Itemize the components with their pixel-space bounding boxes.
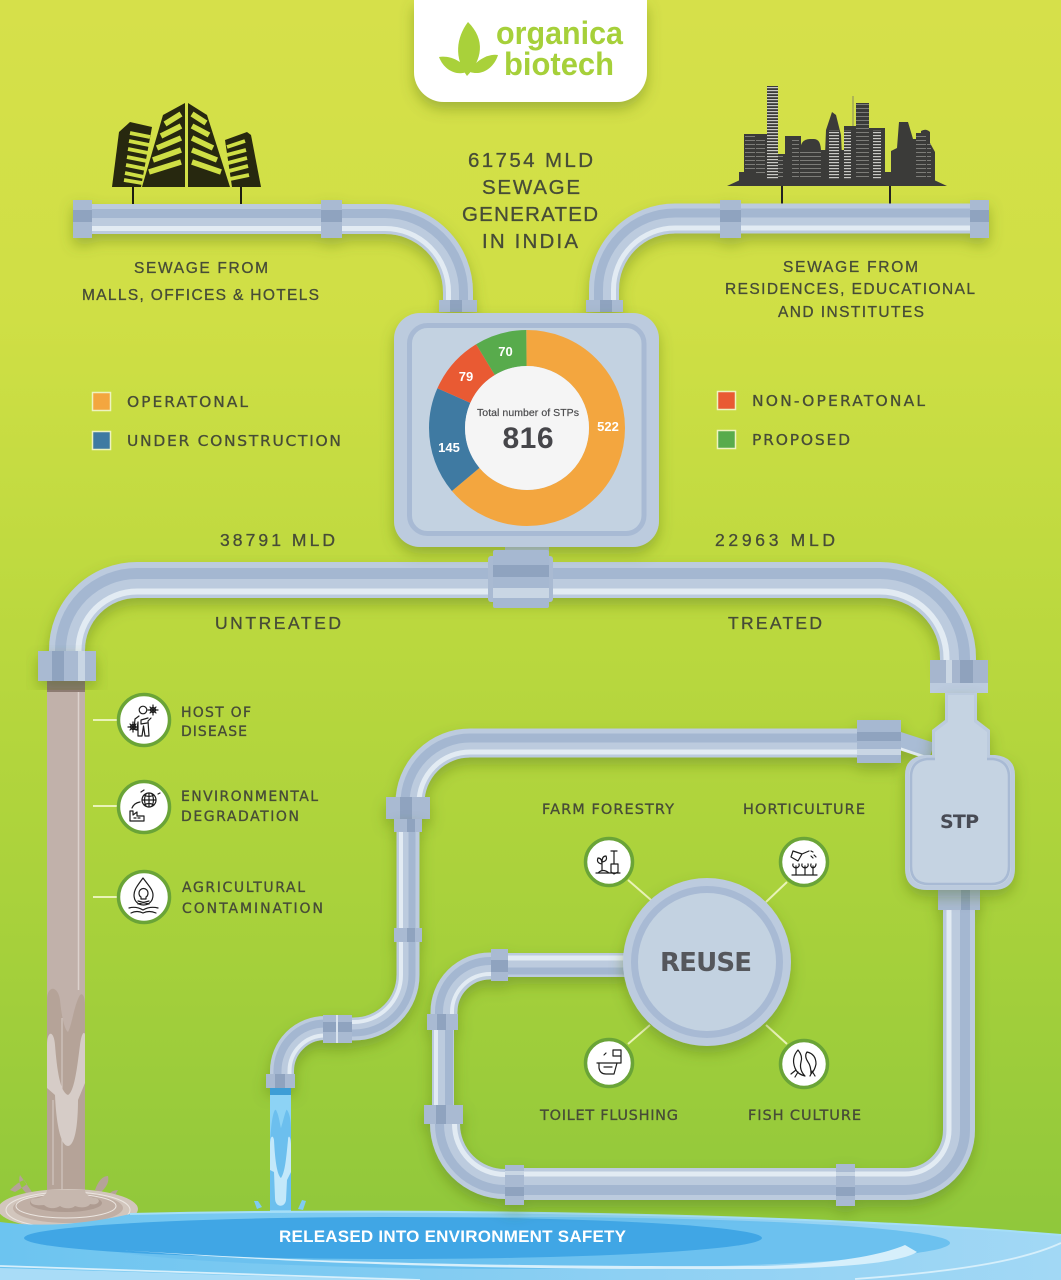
impact: environmental degradation: ENVIRONMENTAL (181, 789, 318, 805)
chart: STP donut: Total number of STPs (477, 407, 579, 419)
legend: right: NON-OPERATONAL (752, 392, 925, 410)
heading: total sewage: 61754 MLD (468, 149, 593, 172)
pipe: commercial sewage (73, 200, 477, 312)
label: residential sewage: SEWAGE FROM (783, 259, 918, 276)
chart: STP donut (438, 344, 619, 508)
reuse: toilet flushing: TOILET FLUSHING (539, 1108, 678, 1124)
icon: person and virus (128, 705, 158, 736)
legend: right (718, 392, 925, 449)
pool caption: RELEASED INTO ENVIRONMENT SAFETY (279, 1227, 627, 1246)
icon: spade and plant (596, 851, 620, 874)
pipe: residential sewage (586, 200, 989, 312)
impact: agricultural contamination: AGRICULTURAL (182, 880, 305, 896)
heading: total sewage: GENERATED (462, 203, 598, 226)
pipe collar: untreated outlet (38, 651, 96, 681)
logo text: organica (496, 15, 623, 51)
impacts of untreated sewage (93, 694, 323, 922)
chart: STP donut: 816 (502, 422, 554, 455)
label: residential sewage (725, 259, 975, 321)
legend: right: PROPOSED (752, 431, 850, 449)
values: untreated and treated: 38791 MLD (220, 530, 335, 550)
icon: office buildings (112, 103, 261, 204)
label: commercial sewage: SEWAGE FROM (134, 260, 268, 277)
reuse: toilet flushing (539, 1040, 678, 1124)
reuse: horticulture: HORTICULTURE (743, 802, 865, 818)
impact: agricultural contamination (93, 872, 323, 922)
label: commercial sewage (82, 260, 319, 304)
icon: koi fish (791, 1050, 816, 1077)
impact: host of disease (93, 694, 251, 746)
chart: STP donut: 79 (459, 369, 473, 384)
icon: toilet (597, 1050, 621, 1074)
untreated outflow stream (0, 681, 138, 1229)
impact: host of disease: HOST OF (181, 705, 251, 721)
pipe coupling: centre (488, 550, 553, 608)
chart: STP donut: 522 (597, 419, 619, 434)
icon: city skyline (727, 86, 947, 204)
reuse: fish culture (748, 1040, 861, 1124)
pipe: STP to reuse outlet upper run (386, 720, 932, 819)
reuse: farm forestry (542, 802, 674, 886)
reuse: horticulture (743, 802, 865, 886)
heading: total sewage: SEWAGE (482, 176, 580, 199)
icon: leaf (439, 22, 498, 76)
reuse: farm forestry: FARM FORESTRY (542, 802, 674, 818)
STP label: STP (940, 811, 979, 833)
effluent puddle (0, 1175, 138, 1229)
impact: host of disease: DISEASE (181, 724, 247, 740)
panel: STP count box (394, 313, 659, 554)
values: untreated and treated: 22963 MLD (715, 530, 835, 550)
impact: environmental degradation (93, 782, 318, 832)
treated water stream (250, 1088, 309, 1214)
pipe: STP to reuse lower loop (424, 890, 980, 1206)
reuse: fish culture: FISH CULTURE (748, 1108, 861, 1124)
panel: STP tank (905, 660, 1015, 890)
icon: factory and globe (130, 790, 160, 821)
icon: watering can and seedlings (791, 851, 817, 875)
label: commercial sewage: MALLS, OFFICES & HOTELS (82, 287, 319, 304)
label: residential sewage: RESIDENCES, EDUCATIONAL (725, 281, 975, 298)
pool of water (0, 1212, 1061, 1280)
pipe: treated water to environment (266, 819, 422, 1088)
impact: agricultural contamination: CONTAMINATION (182, 901, 323, 917)
impact: environmental degradation: DEGRADATION (181, 809, 299, 825)
values: untreated and treated: TREATED (728, 613, 822, 633)
logo text (496, 15, 623, 82)
chart: STP donut: 70 (498, 344, 513, 359)
icon: poison drop (129, 878, 158, 913)
logo text: biotech (504, 46, 614, 82)
panel: reuse hub: REUSE (660, 948, 752, 978)
legend: left: OPERATONAL (127, 393, 248, 411)
heading: total sewage (462, 149, 598, 253)
logo (414, 0, 647, 102)
values: untreated and treated (215, 530, 835, 633)
label: residential sewage: AND INSTITUTES (778, 304, 924, 321)
values: untreated and treated: UNTREATED (215, 613, 341, 633)
panel: reuse hub (623, 878, 791, 1046)
legend: left (92, 392, 341, 450)
chart: STP donut: 145 (438, 440, 460, 455)
heading: total sewage: IN INDIA (482, 230, 578, 253)
pipe: main split (60, 574, 964, 665)
legend: left: UNDER CONSTRUCTION (127, 432, 341, 450)
